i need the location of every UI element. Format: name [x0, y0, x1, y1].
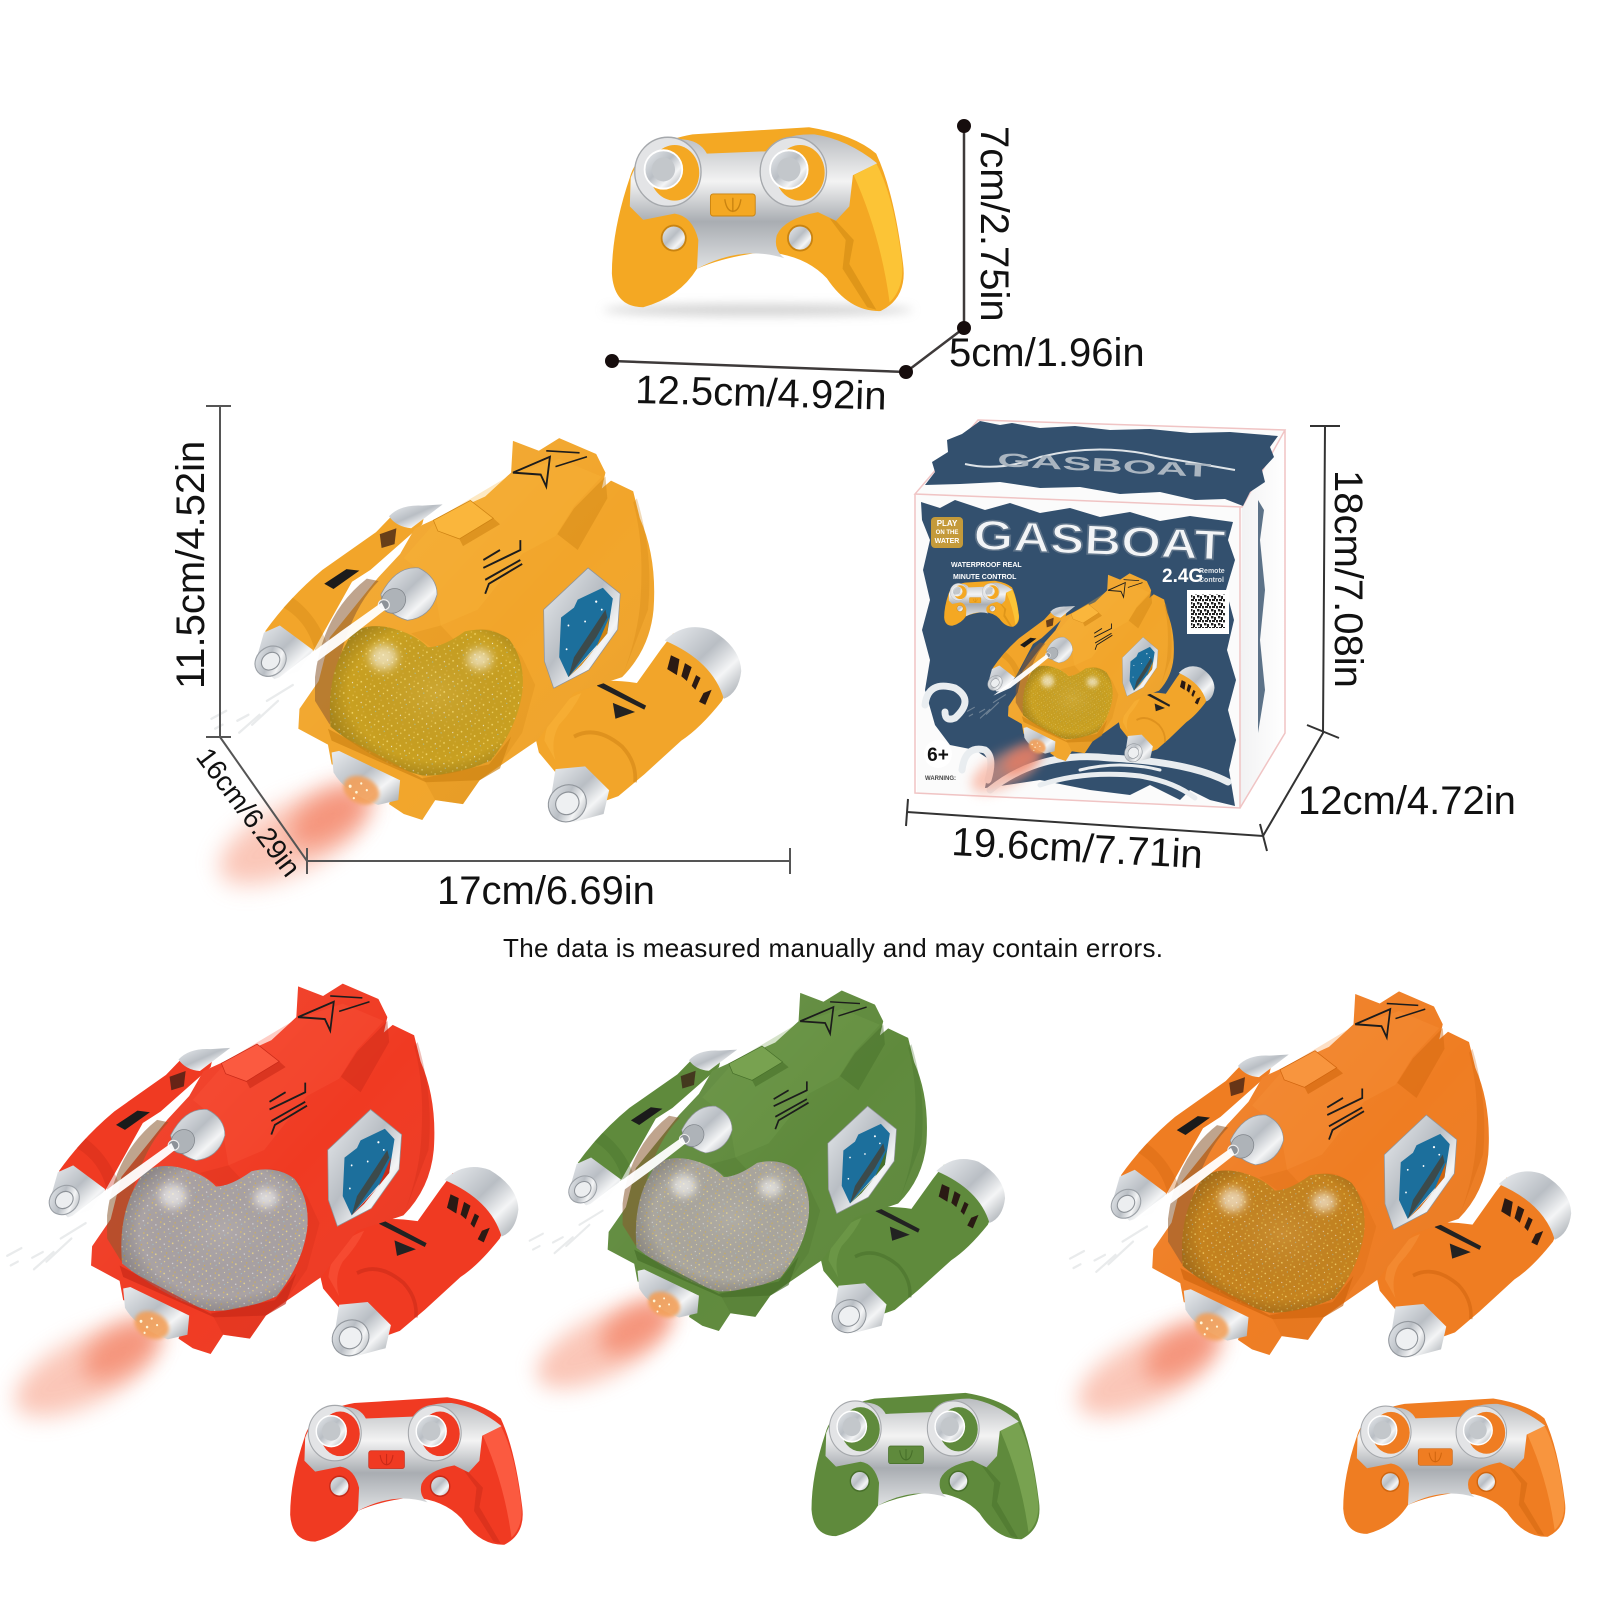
- box art: play on the water badge: PLAY: [937, 519, 958, 528]
- boat: yellow: [207, 438, 741, 903]
- label: box depth: 12cm/4.72in: [1298, 779, 1516, 823]
- box art: age badge: [924, 740, 952, 768]
- box art: logo: GASBOAT: [973, 511, 1227, 569]
- shadow under controller: [603, 304, 913, 316]
- label: boat width: 17cm/6.69in: [437, 869, 655, 913]
- box art: mini boat: [966, 573, 1214, 802]
- icon: yellow remote controller: [612, 127, 904, 311]
- variant: green boat and controller: [526, 990, 1040, 1539]
- box art: 2.4G remote control: 2.4G: [1162, 566, 1203, 587]
- label: box width: 19.6cm/7.71in: [951, 820, 1204, 877]
- box art: QR code: [1187, 590, 1229, 634]
- box art: swirls: [925, 686, 1228, 798]
- box art: lid logo: GASBOAT: [997, 450, 1212, 482]
- box art: play on the water badge: [931, 517, 963, 548]
- box art: mini controller: [944, 581, 1019, 627]
- variant: red boat and controller: [3, 984, 523, 1545]
- dimension lines: box: [906, 426, 1340, 851]
- box art: waterproof caption: WATERPROOF REAL: [951, 562, 1022, 569]
- box art: waterproof caption: [951, 562, 1022, 581]
- label: boat depth: 16cm/6.29in: [190, 742, 307, 882]
- dimension lines: boat: [206, 406, 790, 874]
- label: controller depth: 5cm/1.96in: [949, 331, 1145, 375]
- box art: play on the water badge: ON THE: [936, 530, 958, 536]
- label: box height: 18cm/7.08in: [1326, 470, 1370, 688]
- box art: age badge: 6+: [927, 745, 949, 766]
- box art: play on the water badge: WATER: [935, 538, 959, 545]
- box art: 2.4G remote control: Remote: [1199, 568, 1225, 575]
- box art: lid logo: [965, 450, 1235, 482]
- box art: warning text: WARNING:: [925, 776, 956, 782]
- label: boat height: 11.5cm/4.52in: [169, 441, 213, 689]
- box art: waterproof caption: MINUTE CONTROL: [953, 574, 1017, 581]
- panel: boat dimensions: [169, 406, 790, 913]
- note: measurement disclaimer: The data is measured manually and may contain errors.: [503, 933, 1163, 963]
- label: controller width: 12.5cm/4.92in: [635, 368, 887, 419]
- panel: packaging box dimensions: [906, 420, 1516, 877]
- variant: orange boat and controller: [1066, 991, 1571, 1537]
- label: controller height: 7cm/2.75in: [972, 126, 1016, 322]
- box: faces: [915, 420, 1285, 808]
- box art: 2.4G remote control: [1162, 566, 1225, 587]
- dimension lines: controller: [605, 119, 971, 379]
- panel: remote controller dimensions: [603, 119, 1145, 419]
- box art: 2.4G remote control: Control: [1199, 577, 1224, 584]
